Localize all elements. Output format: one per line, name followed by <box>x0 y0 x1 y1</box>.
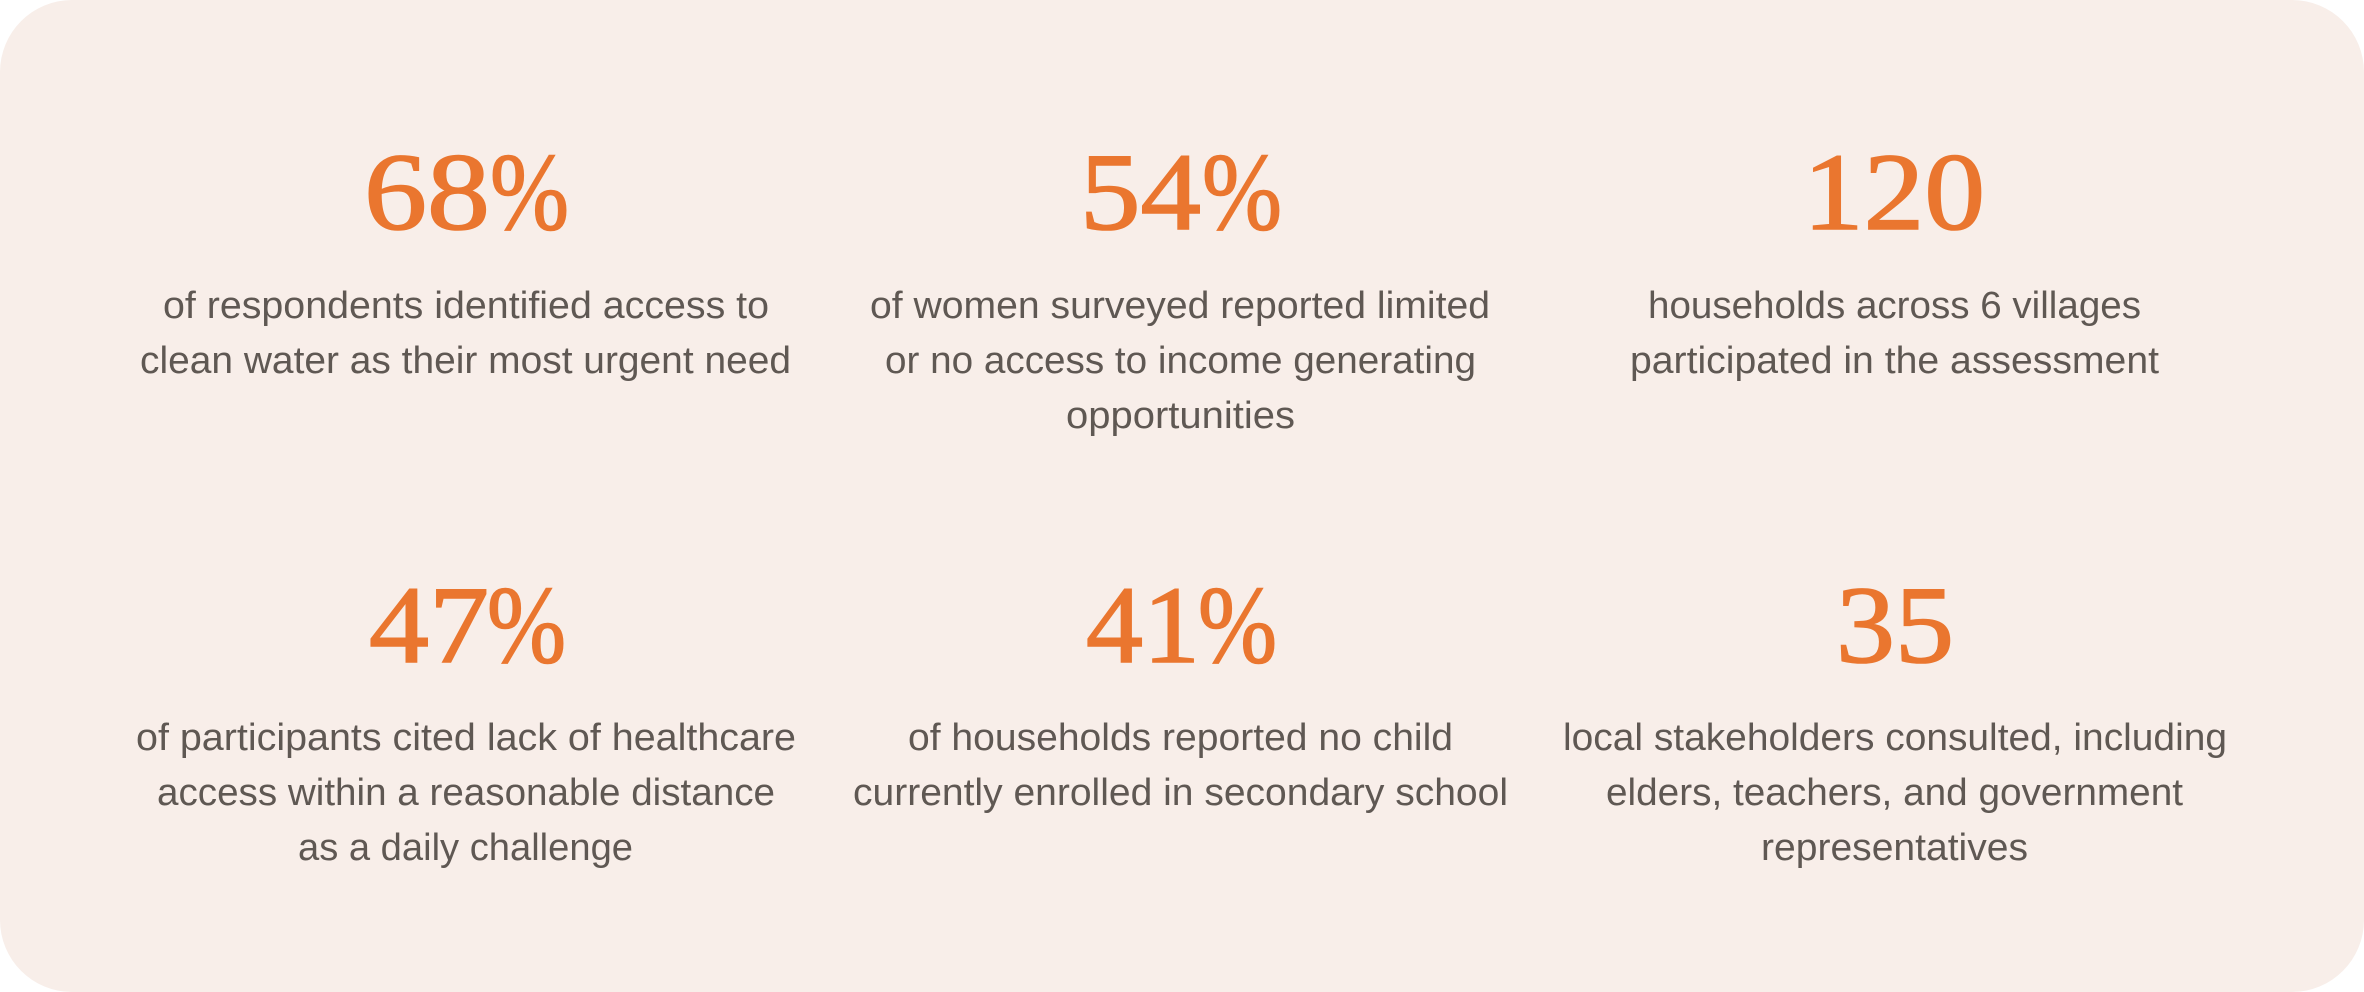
number: 120: 120 <box>1803 131 1985 253</box>
text: secondary school description: currently enrolled in secondary school <box>853 772 1508 814</box>
text: healthcare description <box>136 717 796 869</box>
text: women income description <box>870 285 1490 437</box>
text: households description: households across 6 villages <box>1648 285 2141 327</box>
number: 47%: 47 <box>369 564 489 686</box>
number: 35: 35 <box>1836 564 1954 686</box>
text: healthcare description: access within a reasonable distance <box>157 772 775 814</box>
text: stakeholders description: local stakeholders consulted, including <box>1563 717 2227 759</box>
number: 54%: % <box>1202 131 1282 253</box>
text: clean water description: clean water as their most urgent need <box>140 340 791 382</box>
number: 41%: % <box>1198 564 1277 686</box>
stat: 35 stakeholders <box>1563 564 2227 869</box>
text: healthcare description: as a daily challenge <box>298 827 633 869</box>
stat: 120 households <box>1630 131 2159 382</box>
number: 41%: 41 <box>1086 564 1200 686</box>
text: women income description: of women surveyed reported limited <box>870 285 1490 327</box>
number: 68%: % <box>490 131 569 253</box>
number: 54%: 54 <box>1080 131 1201 253</box>
text: clean water description: of respondents identified access to <box>163 285 769 327</box>
text: households description: participated in the assessment <box>1630 340 2159 382</box>
text: stakeholders description: elders, teachers, and government <box>1606 772 2183 814</box>
text: secondary school description: of households reported no child <box>908 717 1453 759</box>
number: 47%: % <box>487 564 566 686</box>
text: women income description: opportunities <box>1066 395 1295 437</box>
text: stakeholders description: representatives <box>1761 827 2028 869</box>
text: healthcare description: of participants cited lack of healthcare <box>136 717 796 759</box>
text: households description <box>1630 285 2159 382</box>
stat: 54% women income <box>870 131 1490 437</box>
text: women income description: or no access to income generating <box>885 340 1476 382</box>
text: secondary school description <box>853 717 1508 814</box>
number: 68%: 68 <box>364 131 490 253</box>
text: clean water description <box>140 285 791 382</box>
stat: 68% clean water <box>140 131 791 382</box>
stat: 41% secondary school <box>853 564 1508 814</box>
stat: 47% healthcare <box>136 564 796 869</box>
text: stakeholders description <box>1563 717 2227 869</box>
